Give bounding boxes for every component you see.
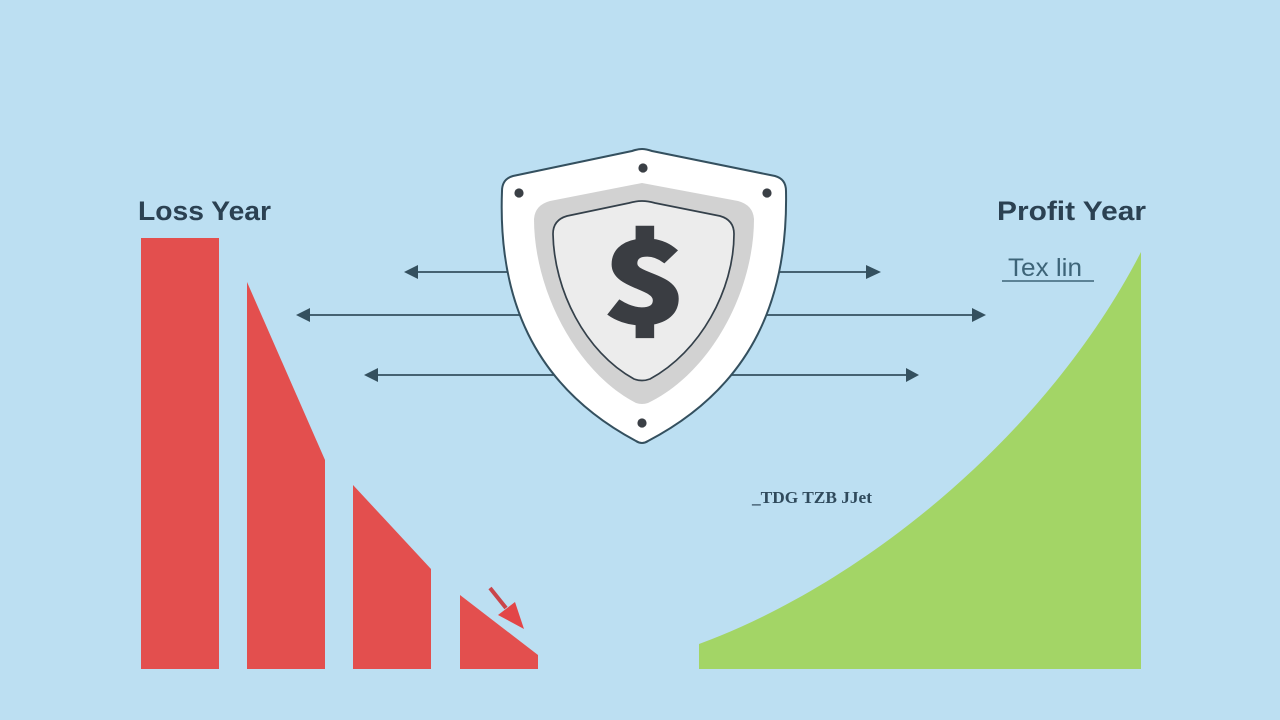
bar 2: [247, 282, 325, 669]
bar 1: [141, 238, 219, 669]
icon: dollar shield: [502, 149, 786, 443]
bar 4: [460, 595, 538, 669]
arrow: upper right: [775, 265, 881, 279]
arrows: flows passing behind the shield: [296, 265, 986, 382]
arrow: lower left: [364, 368, 558, 382]
heading: Loss Year: Loss Year: [138, 196, 272, 226]
shield outer plate: [502, 149, 786, 443]
shield grey band: [534, 183, 754, 404]
arrow: middle right: [762, 308, 986, 322]
label: small garbled caption: _TDG TZB JJet: [751, 488, 872, 507]
shield inner panel: [553, 201, 734, 380]
icon: red down arrow: [490, 588, 524, 629]
arrow: lower right: [727, 368, 919, 382]
rivets: [514, 163, 772, 428]
arrow: upper left: [404, 265, 510, 279]
bar 3: [353, 485, 431, 669]
chart: rising profit curve: [699, 252, 1141, 669]
heading: Profit Year: Profit Year: [997, 196, 1147, 226]
label: Tex lin: Tex lin: [1008, 254, 1082, 282]
chart: declining loss bars: [141, 238, 538, 669]
dollar sign: $: [603, 193, 687, 356]
arrow: middle left: [296, 308, 525, 322]
